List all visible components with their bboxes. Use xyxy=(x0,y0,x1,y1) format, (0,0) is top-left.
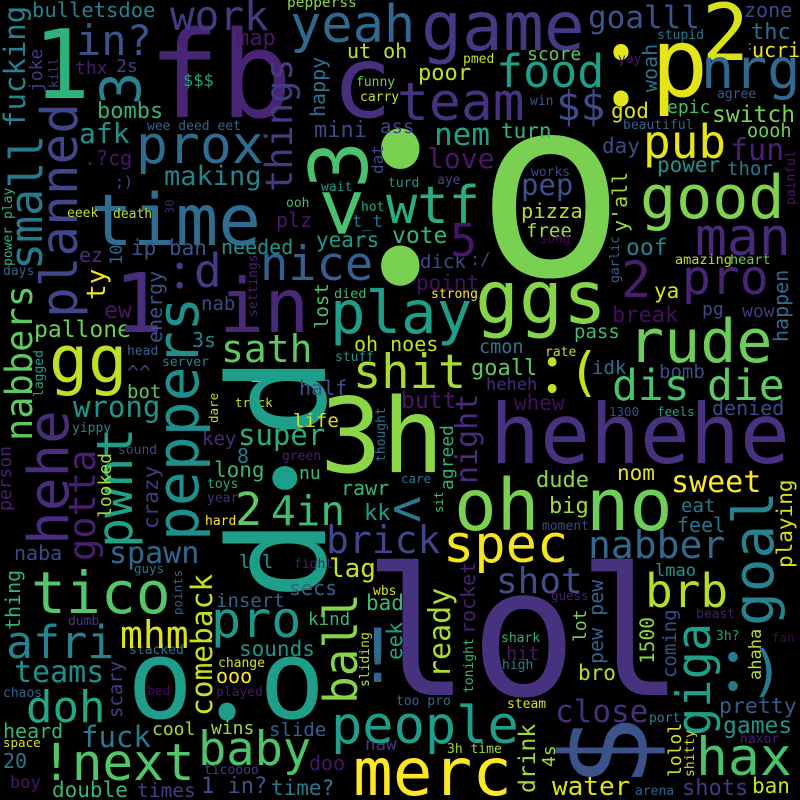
word: 20: 20 xyxy=(3,749,27,773)
word: agree: agree xyxy=(717,87,756,102)
word: pretty: pretty xyxy=(719,694,797,719)
word: 3h: 3h xyxy=(320,377,444,497)
word: doh: doh xyxy=(26,682,105,733)
word: secs: secs xyxy=(289,576,337,600)
word: 1300: 1300 xyxy=(609,404,639,419)
word: wbs: wbs xyxy=(373,584,396,599)
word: break: break xyxy=(612,303,678,328)
word: 2s: 2s xyxy=(116,56,138,77)
word: mhm: mhm xyxy=(120,613,189,657)
word: hard: hard xyxy=(205,514,236,529)
word: turd: turd xyxy=(388,176,419,191)
word: free: free xyxy=(526,220,572,242)
word: brb: brb xyxy=(645,564,728,618)
word: funny: funny xyxy=(356,75,395,90)
word: thx: thx xyxy=(75,58,108,79)
word: rude: rude xyxy=(628,307,772,377)
word: years: years xyxy=(316,228,379,252)
word: agreed: agreed xyxy=(437,425,458,490)
word: drink: drink xyxy=(515,724,541,793)
word: 2 purple: 2 xyxy=(621,251,651,309)
word: ut oh: ut oh xyxy=(347,39,407,63)
word: lot: lot xyxy=(570,609,591,642)
word: dare: dare xyxy=(206,393,221,423)
word: woah: woah xyxy=(638,44,662,92)
word: server: server xyxy=(162,355,209,370)
word: scary: scary xyxy=(105,661,127,718)
word: games: games xyxy=(723,713,792,739)
word: team: team xyxy=(397,72,525,133)
word: lagged: lagged xyxy=(32,350,47,397)
word: song: song xyxy=(540,231,570,246)
word: day: day xyxy=(602,134,640,158)
word: heard: heard xyxy=(3,719,63,743)
word: guys: guys xyxy=(134,561,164,576)
word: die: die xyxy=(707,361,785,411)
word: ggs: ggs xyxy=(475,256,607,341)
word: shit: shit xyxy=(353,345,466,400)
word: fan: fan xyxy=(772,630,795,645)
word: planned: planned xyxy=(31,103,90,318)
word: in?: in? xyxy=(76,16,152,65)
word: happen: happen xyxy=(769,270,793,342)
word: stupid: stupid xyxy=(657,28,704,43)
word: wee deed eet: wee deed eet xyxy=(147,119,241,134)
word: playing: playing xyxy=(773,479,797,568)
word: oof: oof xyxy=(626,235,668,261)
word: fun: fun xyxy=(730,133,784,168)
word: 1500: 1500 xyxy=(636,617,659,664)
word: y'all: y'all xyxy=(608,172,632,232)
word: cool: cool xyxy=(152,719,195,740)
word: 3 rotated: 3 xyxy=(89,72,153,105)
word: amazing: amazing xyxy=(675,252,732,268)
word: pro: pro xyxy=(682,250,769,306)
word: :(: ( xyxy=(568,342,600,403)
word: fb: fb xyxy=(148,7,292,146)
word: change: change xyxy=(218,656,265,671)
word: carry: carry xyxy=(360,90,399,105)
word: pallone: pallone xyxy=(34,317,131,343)
word: cmon: cmon xyxy=(479,337,524,358)
word: nem: nem xyxy=(434,117,490,153)
word: 10: 10 xyxy=(107,245,127,265)
word: feels: feels xyxy=(657,404,695,419)
word: heart: heart xyxy=(730,252,771,268)
word: :(: : xyxy=(543,316,561,412)
word: big: big xyxy=(549,494,589,519)
word: thc: thc xyxy=(751,20,791,45)
word: wins: wins xyxy=(211,718,254,739)
word: $$$: $$$ xyxy=(183,71,214,91)
word: hehe: hehe xyxy=(17,410,82,545)
word: nab: nab xyxy=(201,293,235,315)
word: switch: switch xyxy=(712,102,795,128)
word: spawn: spawn xyxy=(109,536,199,571)
word: d.d: . xyxy=(86,453,347,503)
word: beast: beast xyxy=(696,607,735,622)
word: :d: : xyxy=(173,232,186,302)
word: nom: nom xyxy=(617,461,655,485)
word: 4s: 4s xyxy=(539,745,560,767)
word: coming: coming xyxy=(659,609,681,678)
word: sweet: sweet xyxy=(671,465,761,500)
word: 30: 30 xyxy=(163,200,177,214)
word: died: died xyxy=(334,286,367,302)
word: ooh: ooh xyxy=(286,196,309,211)
word: life: life xyxy=(293,410,339,432)
word: <: < xyxy=(392,479,422,537)
word: nu: nu xyxy=(299,463,321,484)
word: ew: ew xyxy=(104,298,132,324)
word: goalll: goalll xyxy=(588,0,700,36)
word: steam: steam xyxy=(507,697,546,712)
word: pass: pass xyxy=(574,321,620,343)
word: pro teal: pro xyxy=(211,591,301,649)
word: d.d: d xyxy=(200,519,357,600)
word: d.d: d xyxy=(200,356,357,438)
word: 5: 5 xyxy=(450,214,477,267)
word: bot: bot xyxy=(127,381,161,403)
word: man: man xyxy=(695,207,791,268)
word: energy: energy xyxy=(143,271,167,343)
word: ooo: ooo xyxy=(216,664,252,688)
word: giga: giga xyxy=(667,623,722,736)
word: poor: poor xyxy=(418,61,471,86)
word: goall: goall xyxy=(471,356,537,381)
word: small: small xyxy=(0,135,53,270)
word: t_t: t_t xyxy=(352,212,383,232)
word: peppers: peppers xyxy=(144,297,212,541)
word: too pro: too pro xyxy=(396,694,451,709)
word: half: half xyxy=(299,376,347,400)
word: in: in xyxy=(219,262,309,350)
word: ball: ball xyxy=(314,593,368,704)
word: whew: whew xyxy=(514,391,565,415)
word: goal: goal xyxy=(722,491,787,626)
word: 1 in?: 1 in? xyxy=(201,774,267,799)
word: 2 green: 2 xyxy=(235,483,262,536)
word: pep: pep xyxy=(521,168,573,202)
word: super: super xyxy=(238,418,325,452)
word: dis: dis xyxy=(612,361,690,411)
word: shot: shot xyxy=(496,561,583,602)
word: :): : xyxy=(723,606,743,711)
word: comeback: comeback xyxy=(185,574,219,716)
word: win: win xyxy=(530,94,553,109)
word: stuff: stuff xyxy=(335,350,374,365)
word: ticoooo: ticoooo xyxy=(204,763,259,778)
word: denied: denied xyxy=(712,396,784,420)
word: oooh: oooh xyxy=(747,121,792,142)
word: :p: p xyxy=(651,9,708,119)
word: dat: dat xyxy=(368,145,387,174)
word: bed: bed xyxy=(147,684,170,699)
word: vote: vote xyxy=(392,223,447,249)
word: high: high xyxy=(502,658,533,673)
word: ready: ready xyxy=(423,588,458,678)
word: rate: rate xyxy=(545,345,576,360)
word: painful: painful xyxy=(784,150,799,205)
word: bomb: bomb xyxy=(659,361,705,383)
word: close: close xyxy=(555,694,648,730)
word: mini: mini xyxy=(314,118,367,143)
word: haxor: haxor xyxy=(740,732,779,747)
word: lol: lol xyxy=(363,530,684,737)
word: :d: d xyxy=(194,244,222,298)
word: insert: insert xyxy=(216,590,285,612)
word: hit: hit xyxy=(506,644,539,665)
word: arena: arena xyxy=(635,784,674,799)
word: ahaha: ahaha xyxy=(746,629,766,680)
word: thor: thor xyxy=(727,158,773,180)
word: 7: 7 xyxy=(250,377,264,403)
word: kind: kind xyxy=(308,610,350,630)
word: making: making xyxy=(164,161,262,192)
word: eeek: eeek xyxy=(67,206,98,221)
word: port: port xyxy=(649,711,680,726)
word: joke: joke xyxy=(26,49,47,92)
word: nrg: nrg xyxy=(701,37,800,101)
word: stacked: stacked xyxy=(129,643,184,658)
word: 3h time: 3h time xyxy=(447,742,502,757)
word: 4in: 4in xyxy=(271,487,345,535)
word: wow: wow xyxy=(742,301,775,322)
word: fight: fight xyxy=(294,557,333,572)
word: !: ! xyxy=(355,612,400,700)
word: :o: o xyxy=(476,43,626,334)
word: pew pew: pew pew xyxy=(584,579,608,664)
word: sit: sit xyxy=(432,491,446,513)
word: lil: lil xyxy=(239,551,273,573)
word: <3: <3 xyxy=(293,141,386,237)
word: wait: wait xyxy=(321,180,352,195)
word: hehehe: hehehe xyxy=(490,386,790,483)
word: .?cg: .?cg xyxy=(84,146,132,170)
word: naba: naba xyxy=(14,541,62,565)
word: idk: idk xyxy=(592,357,627,379)
word: happy: happy xyxy=(306,57,330,117)
word: afk: afk xyxy=(79,117,130,150)
word: turn: turn xyxy=(501,119,552,143)
word: love: love xyxy=(427,142,494,175)
word: points: points xyxy=(170,570,185,615)
word: guess: guess xyxy=(551,588,589,603)
word: bombs: bombs xyxy=(97,99,163,124)
word: power play: power play xyxy=(1,188,16,266)
word: nabber: nabber xyxy=(588,523,725,567)
word: crazy: crazy xyxy=(139,466,163,529)
word: pmed: pmed xyxy=(463,52,494,67)
word: ya: ya xyxy=(654,279,679,303)
word: doo: doo xyxy=(309,751,345,775)
word: bro: bro xyxy=(578,661,616,685)
word: thing: thing xyxy=(1,570,25,630)
word: score: score xyxy=(527,44,581,65)
word: nice: nice xyxy=(260,237,373,292)
word: time?: time? xyxy=(271,776,334,800)
word: kill: kill xyxy=(46,58,61,88)
word: ^^: ^^ xyxy=(127,361,151,385)
word: c: c xyxy=(332,24,392,141)
word: god: god xyxy=(611,99,649,123)
word: pg: pg xyxy=(702,299,724,320)
word: sounds: sounds xyxy=(239,637,315,661)
word: brick: brick xyxy=(326,518,441,562)
word: eat: eat xyxy=(681,495,715,517)
word: power: power xyxy=(657,153,720,177)
word: 3s: 3s xyxy=(192,328,216,352)
word: heheh: heheh xyxy=(486,375,537,395)
word: lag: lag xyxy=(329,554,376,584)
word: hot: hot xyxy=(361,200,384,215)
word: rocket: rocket xyxy=(456,562,480,634)
word: 8: 8 xyxy=(237,444,249,468)
word: wrong: wrong xyxy=(73,390,160,424)
word: $: $ xyxy=(537,716,676,788)
word: food: food xyxy=(496,45,604,98)
word: ip ban: ip ban xyxy=(131,236,207,260)
word: sound: sound xyxy=(118,443,157,458)
word: looked: looked xyxy=(95,453,116,518)
word: fuck: fuck xyxy=(81,720,151,754)
word: ty: ty xyxy=(82,269,112,300)
word: tico: tico xyxy=(31,559,171,627)
word: pizza: pizza xyxy=(521,199,583,223)
word: pub: pub xyxy=(643,115,726,169)
word: lost: lost xyxy=(311,283,333,329)
word: shitty: shitty xyxy=(683,730,698,777)
word: 3h?: 3h? xyxy=(716,629,739,644)
word: dude: dude xyxy=(536,468,589,493)
word: spec: spec xyxy=(443,515,568,575)
word: things: things xyxy=(258,58,301,192)
word: settings: settings xyxy=(246,254,261,317)
word: time: time xyxy=(90,179,261,262)
word: thought: thought xyxy=(374,407,389,462)
word: long: long xyxy=(214,458,265,482)
word: afri: afri xyxy=(6,616,114,669)
word: o.o: o xyxy=(127,616,193,744)
word: chaos: chaos xyxy=(3,686,42,701)
word: shark: shark xyxy=(501,631,540,646)
word: naw: naw xyxy=(365,735,397,755)
word: eek: eek xyxy=(383,622,407,660)
word: dick: dick xyxy=(420,251,466,273)
word: feel: feel xyxy=(677,513,725,537)
word: pwnt: pwnt xyxy=(86,428,144,548)
word: point: point xyxy=(416,271,479,295)
word: map: map xyxy=(236,26,276,51)
word: ;): ;) xyxy=(115,173,133,191)
word: ass: ass xyxy=(380,116,414,138)
word: ucri: ucri xyxy=(752,38,800,62)
word: days: days xyxy=(3,264,34,279)
word: good: good xyxy=(640,163,784,233)
word: bad: bad xyxy=(366,591,404,615)
word: :: : xyxy=(746,39,754,54)
word: yippy: yippy xyxy=(72,421,111,436)
word: head: head xyxy=(127,344,158,359)
word: sliding: sliding xyxy=(358,632,373,687)
word: beautiful: beautiful xyxy=(623,118,693,133)
word: 1: 1 xyxy=(33,11,90,121)
word: $$: $$ xyxy=(556,82,605,130)
word: dumb: dumb xyxy=(68,614,99,629)
word: works: works xyxy=(531,165,570,180)
word: care: care xyxy=(401,471,431,486)
word: wtf: wtf xyxy=(386,176,480,236)
word: ban: ban xyxy=(752,774,790,798)
word: people: people xyxy=(331,696,519,756)
word: played: played xyxy=(216,685,263,700)
word: butt: butt xyxy=(401,388,456,414)
word: green: green xyxy=(282,449,321,464)
word: gg: gg xyxy=(49,323,127,398)
word: moment: moment xyxy=(542,519,589,534)
word: kk: kk xyxy=(364,501,390,526)
word: tonight: tonight xyxy=(462,638,477,693)
word: 1 purple: 1 xyxy=(114,257,163,352)
word: boy: boy xyxy=(10,773,41,793)
word: lmao: lmao xyxy=(655,561,696,581)
word: oh: oh xyxy=(454,464,540,547)
word: space: space xyxy=(3,735,41,750)
word: lolol: lolol xyxy=(665,723,686,777)
word: :): ) xyxy=(750,639,783,703)
word: oh noes: oh noes xyxy=(354,332,438,356)
word: aye: aye xyxy=(437,173,461,188)
word: trick: trick xyxy=(235,395,273,410)
word: yay: yay xyxy=(618,52,642,67)
word: slide: slide xyxy=(269,719,326,741)
word: epic: epic xyxy=(667,97,710,118)
word: !next: !next xyxy=(41,734,195,793)
word: gotta: gotta xyxy=(61,450,104,561)
word: plz: plz xyxy=(276,208,312,232)
word: strong: strong xyxy=(431,287,478,302)
word: year: year xyxy=(207,491,238,506)
word: ez: ez xyxy=(79,243,103,267)
word: prox: prox xyxy=(136,115,264,176)
word: :/: :/ xyxy=(470,250,490,270)
word: teams: teams xyxy=(14,655,104,690)
word: o.o: o xyxy=(259,616,325,744)
word: baby: baby xyxy=(198,722,311,777)
word: no: no xyxy=(586,463,673,547)
word: hax: hax xyxy=(696,727,792,788)
word: sath: sath xyxy=(221,327,313,371)
word: needed: needed xyxy=(221,235,293,259)
word: key: key xyxy=(202,428,236,450)
word: night: night xyxy=(450,394,485,484)
word: death: death xyxy=(113,207,152,222)
word: toys: toys xyxy=(207,477,238,492)
word: o.o: . xyxy=(209,569,245,757)
word: play: play xyxy=(330,278,472,347)
word: rawr: rawr xyxy=(341,476,389,500)
word: garlic: garlic xyxy=(608,236,623,283)
